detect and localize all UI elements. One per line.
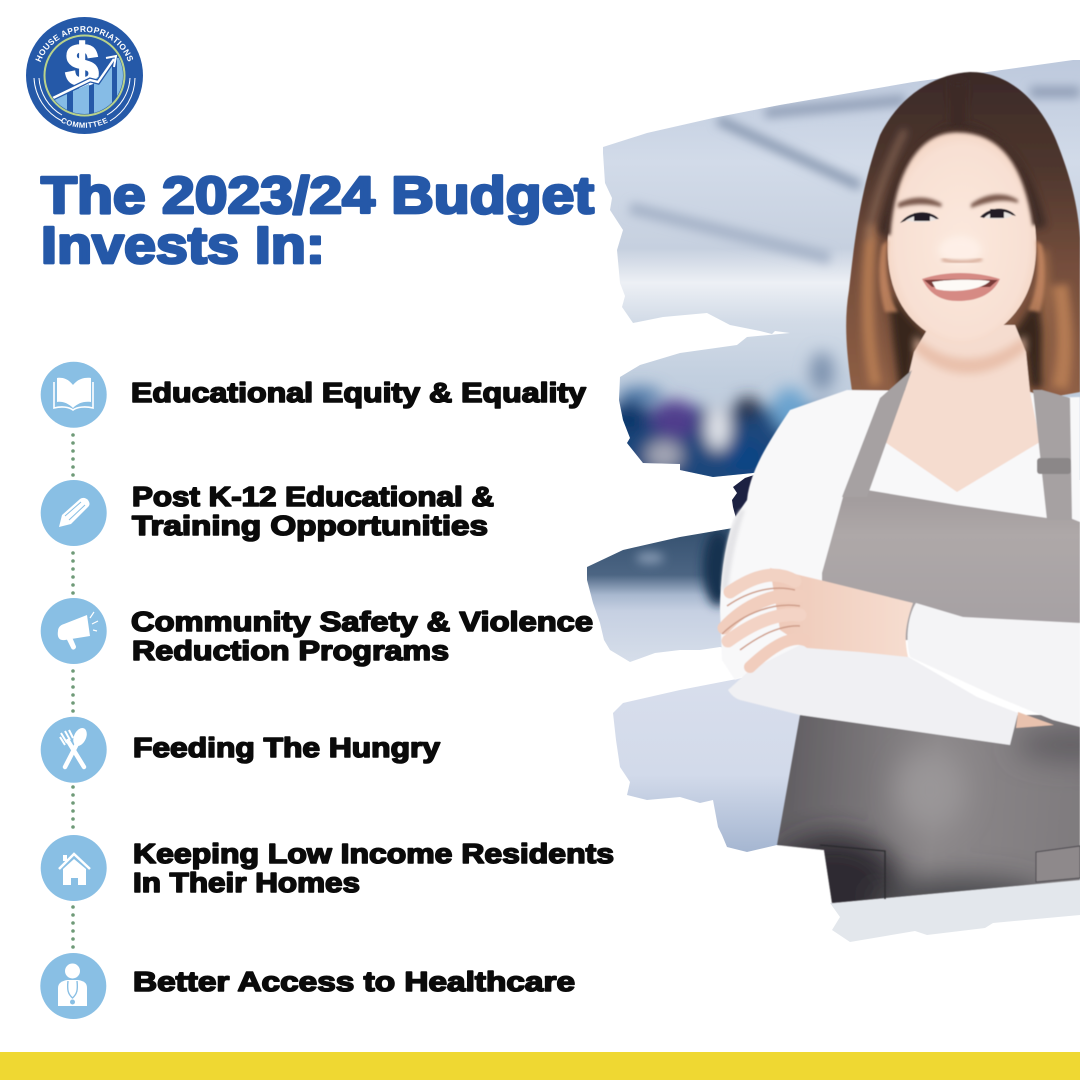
apron bib — [822, 490, 1080, 640]
title line 1: The 2023/24 Budget — [41, 167, 594, 225]
hair highlights — [868, 130, 1064, 388]
brush stroke: middle — [587, 528, 732, 662]
label: Educational Equity & Equality — [131, 377, 587, 408]
item 3: community safety — [41, 598, 593, 666]
title — [41, 167, 594, 275]
logo inner ring — [44, 36, 124, 116]
item 2: post K-12 training — [41, 480, 494, 546]
hand — [722, 568, 913, 667]
icon: house — [41, 835, 107, 901]
tucked hand — [1016, 712, 1054, 728]
soft hair overlap on forehead edge — [888, 130, 1035, 235]
near sleeve — [728, 645, 1018, 745]
icon: doctor — [40, 953, 106, 1019]
brush stroke: lower — [613, 677, 830, 852]
arrow head — [106, 56, 116, 67]
hair back — [846, 72, 1080, 398]
yellow footer bar — [0, 1052, 1080, 1080]
label: Community Safety & Violence — [131, 606, 593, 637]
blurred crowd — [619, 345, 842, 477]
nose — [938, 236, 982, 264]
label: Better Access to Healthcare — [133, 966, 575, 997]
logo disc — [26, 17, 143, 134]
dotted timeline connector — [71, 433, 75, 949]
item 6: better healthcare — [40, 953, 575, 1019]
eye whites — [904, 210, 1012, 222]
logo rings — [34, 78, 135, 121]
label: Keeping Low Income Residents — [133, 838, 614, 869]
arrow outline — [54, 66, 112, 100]
shirt — [720, 390, 1080, 680]
brush stroke: dark sliver — [732, 472, 763, 522]
label: Post K-12 Educational & — [132, 481, 494, 512]
fingers — [730, 575, 795, 592]
strap buckle — [1037, 458, 1071, 474]
dollar sign: $ — [66, 33, 98, 98]
photo: brush-masked background — [585, 55, 1080, 942]
face — [888, 130, 1036, 344]
logo: House Appropriations Committee — [26, 17, 143, 134]
item 5: keeping residents housed — [41, 835, 614, 901]
lips — [922, 273, 1000, 301]
eyebrows — [898, 194, 1018, 208]
icon: pencil — [41, 480, 107, 546]
teeth — [932, 280, 990, 291]
arrow — [53, 59, 114, 98]
right pocket — [1036, 846, 1080, 882]
dark hairline shade behind face — [884, 80, 1040, 235]
mouth shadow — [924, 279, 998, 287]
photo: smiling woman in apron — [720, 72, 1080, 935]
label line 2: Training Opportunities — [132, 510, 488, 541]
neck and chest — [882, 325, 1040, 492]
icon: open book — [41, 362, 107, 428]
irises and lashes — [900, 209, 1016, 223]
apron pockets — [820, 845, 885, 899]
label line 2: Reduction Programs — [132, 635, 449, 666]
apron straps — [842, 370, 1072, 520]
item 1: educational equity — [41, 362, 587, 428]
bars — [54, 58, 123, 114]
logo circular text top: HOUSE APPROPRIATIONS — [35, 26, 133, 62]
shirt elbow shading — [722, 510, 745, 590]
apron lower soft shadows — [778, 721, 1080, 904]
icon: megaphone — [41, 598, 107, 664]
nostrils — [942, 259, 982, 262]
warm face edge — [879, 240, 1045, 312]
brush stroke: upper ceiling and crowd — [590, 55, 1080, 508]
icon: fork and spoon — [41, 717, 107, 783]
dark hair shadow by neck — [888, 292, 1042, 388]
label: Feeding The Hungry — [133, 732, 441, 763]
neck shadow — [914, 335, 1026, 374]
label line 2: In Their Homes — [133, 867, 360, 898]
far sleeve — [908, 603, 1080, 727]
title line 2: Invests In: — [41, 217, 325, 275]
brush stroke: bottom strip — [830, 877, 1080, 942]
logo circular text bottom: COMMITTEE — [61, 118, 108, 128]
apron lower — [776, 714, 1080, 904]
item 4: feeding the hungry — [41, 717, 441, 783]
